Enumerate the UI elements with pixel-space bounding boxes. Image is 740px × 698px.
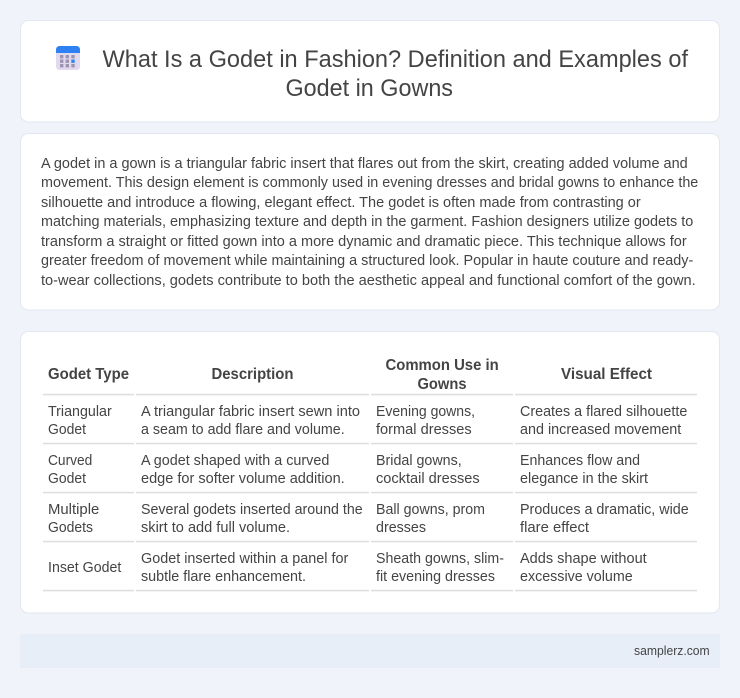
- table header row: Description: [212, 366, 294, 383]
- row: inset godet: Sheath gowns, slim-: [376, 551, 504, 567]
- row: multiple godets: Godets: [48, 520, 93, 536]
- row: triangular godet: Godet: [48, 422, 86, 438]
- row: inset godet: fit evening dresses: [376, 569, 495, 585]
- row: curved godet: Bridal gowns,: [376, 453, 462, 469]
- row: curved godet: [48, 453, 648, 487]
- row: multiple godets: Several godets inserted around the: [141, 502, 363, 518]
- panel: definition text: transform a straight or fitted gown into a more dynamic and dramatic piece. This technique allows for: [41, 234, 687, 250]
- row: multiple godets: Multiple: [48, 502, 99, 518]
- row: curved godet: elegance in the skirt: [520, 471, 648, 487]
- row: inset godet: [48, 551, 647, 585]
- row: multiple godets: Produces a dramatic, wide: [520, 502, 689, 518]
- panel: definition text: greater freedom of movement while maintaining a structured look. Popular in haute couture and ready-: [41, 253, 694, 269]
- row: triangular godet: Creates a flared silhouette: [520, 404, 687, 420]
- row: multiple godets: Ball gowns, prom: [376, 502, 485, 518]
- row: inset godet: Godet inserted within a panel for: [141, 551, 349, 567]
- icon: calendar: [56, 46, 80, 70]
- footer: samplerz.com: [634, 643, 710, 658]
- row: inset godet: Adds shape without: [520, 551, 647, 567]
- row: multiple godets: skirt to add full volume.: [141, 520, 290, 536]
- row: triangular godet: formal dresses: [376, 422, 472, 438]
- table header row: Common Use in: [386, 357, 499, 374]
- row: triangular godet: a seam to add flare and volume.: [141, 422, 345, 438]
- row: multiple godets: flare effect: [520, 520, 589, 536]
- row: curved godet: cocktail dresses: [376, 471, 480, 487]
- row: curved godet: edge for softer volume addition.: [141, 471, 345, 487]
- panel: definition text: silhouette and introduce a flowing, elegant effect. The godet is often made from contrasting or: [41, 195, 641, 211]
- row: multiple godets: [48, 502, 689, 536]
- row: triangular godet: Evening gowns,: [376, 404, 475, 420]
- panel: godet types table: [20, 332, 720, 613]
- title: What Is a Godet in Fashion? Definition and Examples of: [102, 46, 688, 73]
- row: inset godet: subtle flare enhancement.: [141, 569, 306, 585]
- panel: definition text: movement. This design element is commonly used in evening dresses and bridal gowns to enhance the: [41, 175, 698, 191]
- table header row: [48, 357, 653, 393]
- row: inset godet: Inset Godet: [48, 560, 121, 576]
- title: [102, 46, 688, 102]
- panel: definition text: to-wear collections, godets contribute to both the aesthetic appeal and functional comfort of the gown.: [41, 273, 696, 289]
- table header row: Gowns: [418, 376, 467, 393]
- panel: definition text: matching materials, emphasizing texture and depth in the garment. Fashion designers utilize godets to: [41, 214, 693, 230]
- row: curved godet: Godet: [48, 471, 86, 487]
- row: curved godet: Enhances flow and: [520, 453, 640, 469]
- table header row: Visual Effect: [561, 366, 653, 383]
- row: triangular godet: A triangular fabric insert sewn into: [141, 404, 360, 420]
- title: Godet in Gowns: [286, 75, 453, 102]
- footer: [20, 634, 720, 668]
- row: triangular godet: [48, 404, 687, 438]
- row: curved godet: A godet shaped with a curved: [141, 453, 329, 469]
- row: multiple godets: dresses: [376, 520, 426, 536]
- table header row: Godet Type: [48, 366, 129, 383]
- panel: definition text: A godet in a gown is a triangular fabric insert that flares out from the skirt, creating added volume and: [41, 156, 688, 172]
- row: triangular godet: Triangular: [48, 404, 112, 420]
- panel: definition text: [20, 134, 720, 310]
- row: inset godet: excessive volume: [520, 569, 633, 585]
- row: triangular godet: and increased movement: [520, 422, 681, 438]
- row: curved godet: Curved: [48, 453, 92, 469]
- panel: header: [20, 20, 720, 122]
